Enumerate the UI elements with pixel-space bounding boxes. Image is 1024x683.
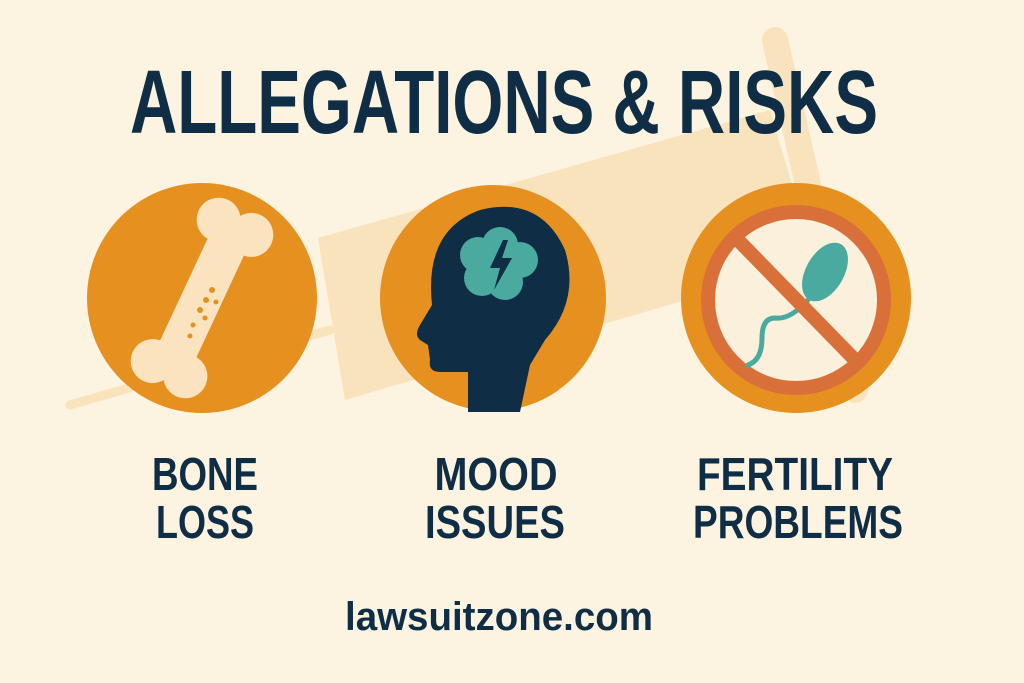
label: fertility problems: FERTILITY xyxy=(697,448,893,500)
footer url: lawsuitzone.com xyxy=(345,595,653,639)
label: bone loss: BONE xyxy=(152,448,258,500)
label: mood issues: MOOD xyxy=(434,448,558,500)
text: LOSS xyxy=(156,496,254,548)
panel: bone loss xyxy=(87,183,317,500)
icon: bone xyxy=(87,183,317,413)
icon: head with brain xyxy=(380,185,606,412)
panel: mood issues xyxy=(380,185,606,500)
icon: no sperm sign xyxy=(681,183,911,413)
text: PROBLEMS xyxy=(693,496,903,548)
text: ISSUES xyxy=(425,496,565,548)
background syringe xyxy=(70,40,855,405)
panel: fertility problems xyxy=(681,183,911,500)
